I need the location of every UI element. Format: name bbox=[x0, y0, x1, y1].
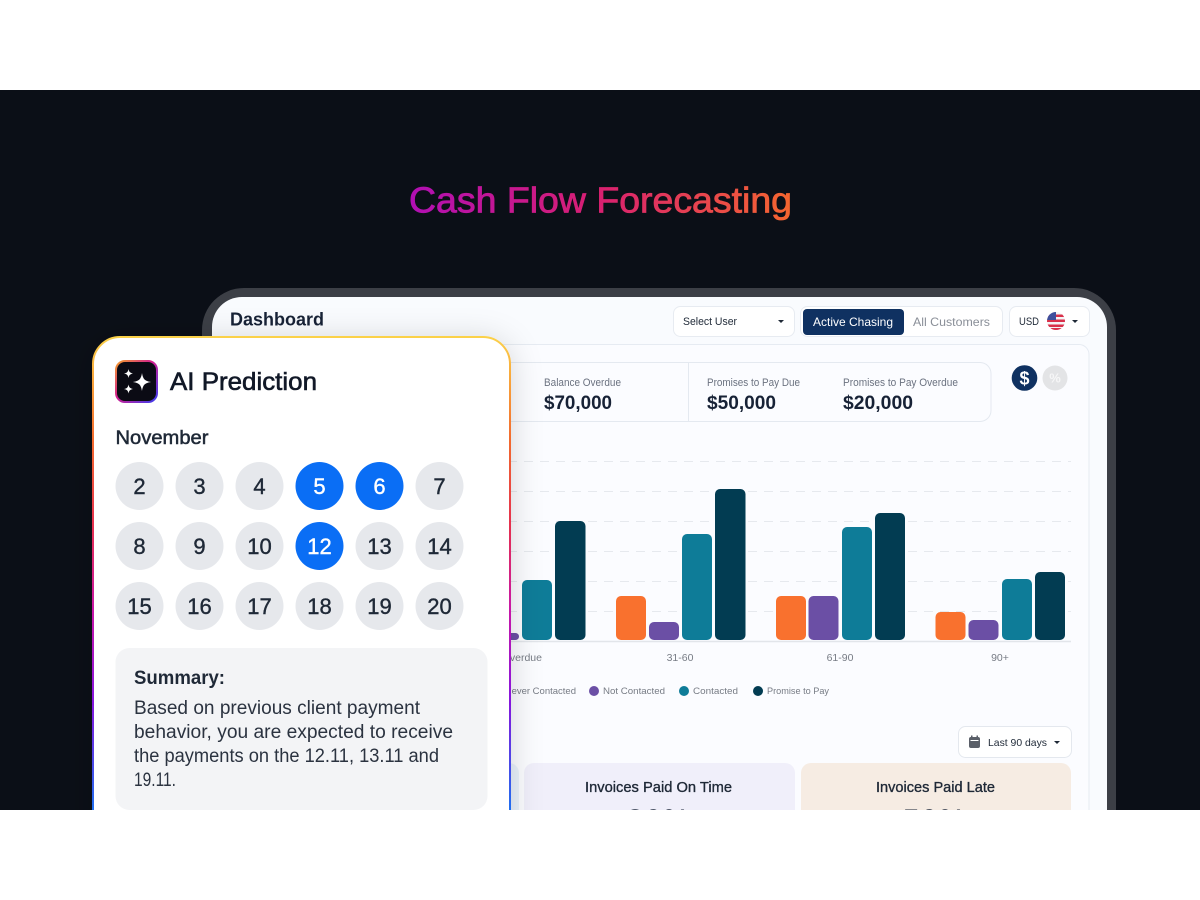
KPI: balance overdue: $70,000 bbox=[544, 393, 612, 414]
summary box: the payments on the 12.11, 13.11 and bbox=[134, 746, 439, 767]
icon: calendar bbox=[969, 736, 980, 748]
date range dropdown: Last 90 days bbox=[988, 737, 1047, 749]
icon: percent toggle bbox=[1042, 366, 1068, 390]
KPI: balance overdue bbox=[544, 377, 621, 414]
icon: dollar toggle bbox=[1012, 365, 1037, 391]
KPI: promises to pay overdue bbox=[843, 377, 958, 414]
metric card: hidden left card bbox=[511, 764, 519, 810]
calendar day grid: 16 bbox=[187, 594, 212, 619]
KPI summary box bbox=[511, 362, 992, 422]
calendar day grid: 14 bbox=[427, 534, 452, 559]
chart legend: Promise to Pay bbox=[767, 686, 829, 697]
KPI: balance overdue: Balance Overdue bbox=[544, 377, 621, 389]
calendar day grid: 2 bbox=[133, 474, 146, 499]
x axis labels: 31-60 bbox=[667, 652, 694, 664]
bars: 31-60 group bbox=[616, 489, 746, 640]
chart legend: Contacted bbox=[693, 686, 738, 697]
month label: November bbox=[116, 428, 209, 449]
metric card: invoices paid late: 50% bbox=[903, 804, 967, 836]
KPI: promises to pay overdue: Promises to Pay Overdue bbox=[843, 377, 958, 389]
calendar day grid: 7 bbox=[433, 474, 446, 499]
summary box: 19.11. bbox=[134, 770, 176, 791]
active chasing toggle bbox=[800, 306, 1002, 336]
metric card: invoices paid on time: Invoices Paid On Time bbox=[585, 779, 732, 796]
date range dropdown bbox=[958, 726, 1072, 758]
currency selector with US flag: USD bbox=[1019, 316, 1039, 328]
panel: AI prediction card bbox=[93, 337, 510, 857]
calendar day grid: 19 bbox=[367, 594, 392, 619]
active chasing toggle: All Customers bbox=[913, 315, 990, 329]
bars: 61-90 group bbox=[776, 513, 905, 640]
x axis labels: Overdue bbox=[502, 652, 542, 664]
bar chart bbox=[511, 461, 1071, 661]
chart legend bbox=[512, 686, 829, 696]
summary box bbox=[116, 648, 488, 810]
calendar day grid: 9 bbox=[193, 534, 206, 559]
KPI: promises to pay due: Promises to Pay Due bbox=[707, 377, 800, 389]
x axis labels: 61-90 bbox=[827, 652, 854, 664]
calendar day grid bbox=[116, 462, 464, 630]
dashboard heading: Dashboard bbox=[230, 310, 324, 330]
select user dropdown: Select User bbox=[683, 316, 737, 328]
active chasing toggle: Active Chasing bbox=[813, 315, 893, 329]
calendar day grid: 3 bbox=[193, 474, 206, 499]
KPI: promises to pay due: $50,000 bbox=[707, 393, 776, 414]
main inner panel bbox=[503, 344, 1090, 810]
x axis labels: 90+ bbox=[991, 652, 1009, 664]
title: Cash Flow Forecasting bbox=[409, 180, 792, 220]
summary box: Summary: bbox=[134, 668, 225, 689]
calendar day grid: 12 bbox=[307, 534, 332, 559]
icon: AI sparkles bbox=[116, 361, 157, 402]
icon: percent toggle: % bbox=[1049, 370, 1061, 386]
dashboard device frame bbox=[202, 288, 1116, 810]
x axis labels bbox=[511, 654, 1008, 661]
summary box: behavior, you are expected to receive bbox=[134, 722, 453, 743]
select user dropdown bbox=[674, 306, 794, 336]
metric card: invoices paid on time bbox=[524, 763, 795, 810]
calendar day grid: 6 bbox=[373, 474, 386, 499]
KPI: promises to pay overdue: $20,000 bbox=[843, 393, 913, 414]
currency selector with US flag bbox=[1010, 306, 1090, 336]
calendar day grid: 4 bbox=[253, 474, 266, 499]
calendar day grid: 20 bbox=[427, 594, 452, 619]
metric card: invoices paid on time: 80% bbox=[627, 804, 691, 836]
calendar day grid: 13 bbox=[367, 534, 392, 559]
calendar day grid: 10 bbox=[247, 534, 272, 559]
bars: 90+ group bbox=[936, 572, 1065, 640]
calendar day grid: 5 bbox=[313, 474, 326, 499]
KPI: promises to pay due bbox=[707, 377, 800, 414]
calendar day grid: 15 bbox=[127, 594, 152, 619]
calendar day grid: 18 bbox=[307, 594, 332, 619]
metric card: invoices paid late bbox=[801, 763, 1071, 810]
calendar day grid: 17 bbox=[247, 594, 272, 619]
summary box: Based on previous client payment bbox=[134, 698, 421, 719]
calendar day grid: 8 bbox=[133, 534, 146, 559]
chart legend: Never Contacted bbox=[505, 686, 576, 697]
metric card: invoices paid late: Invoices Paid Late bbox=[876, 779, 995, 796]
icon: dollar toggle: $ bbox=[1019, 368, 1030, 388]
card heading: AI Prediction bbox=[170, 368, 317, 396]
bars: overdue group bbox=[511, 521, 586, 640]
chart legend: Not Contacted bbox=[603, 686, 665, 697]
